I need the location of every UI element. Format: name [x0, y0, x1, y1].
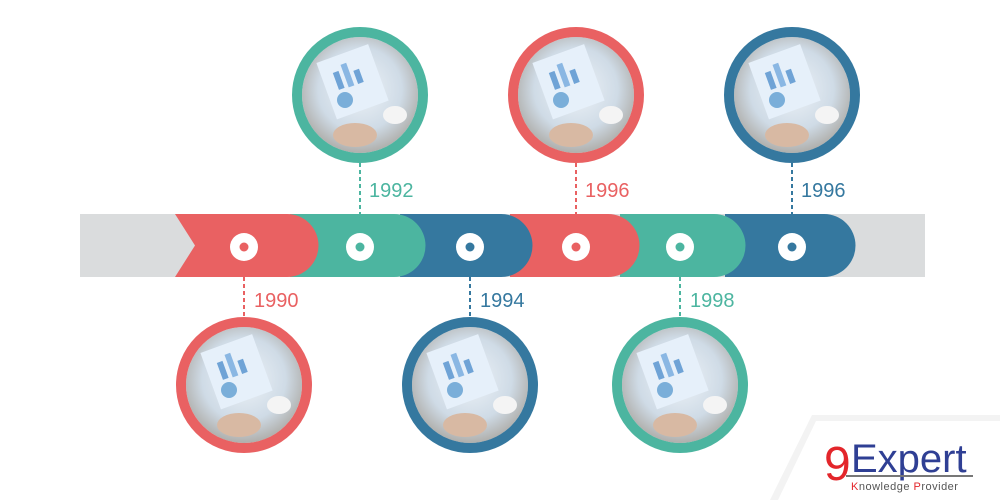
year labels: 1992 — [369, 180, 414, 202]
photo circles top — [297, 32, 855, 158]
timeline markers — [230, 233, 806, 261]
year labels — [254, 180, 846, 312]
photo circles bottom — [181, 322, 743, 448]
logo panel: 9 — [824, 438, 851, 491]
logo panel: Knowledge Provider — [851, 481, 958, 493]
year labels: 1994 — [480, 290, 524, 312]
year labels: 1996 — [801, 180, 846, 202]
year labels: 1998 — [690, 290, 734, 312]
timeline bar background — [80, 214, 925, 277]
logo panel: Expert — [851, 437, 967, 481]
timeline segments — [175, 214, 856, 277]
year labels: 1996 — [585, 180, 630, 202]
logo panel — [770, 415, 1000, 500]
year labels: 1990 — [254, 290, 298, 312]
connectors — [244, 163, 792, 318]
